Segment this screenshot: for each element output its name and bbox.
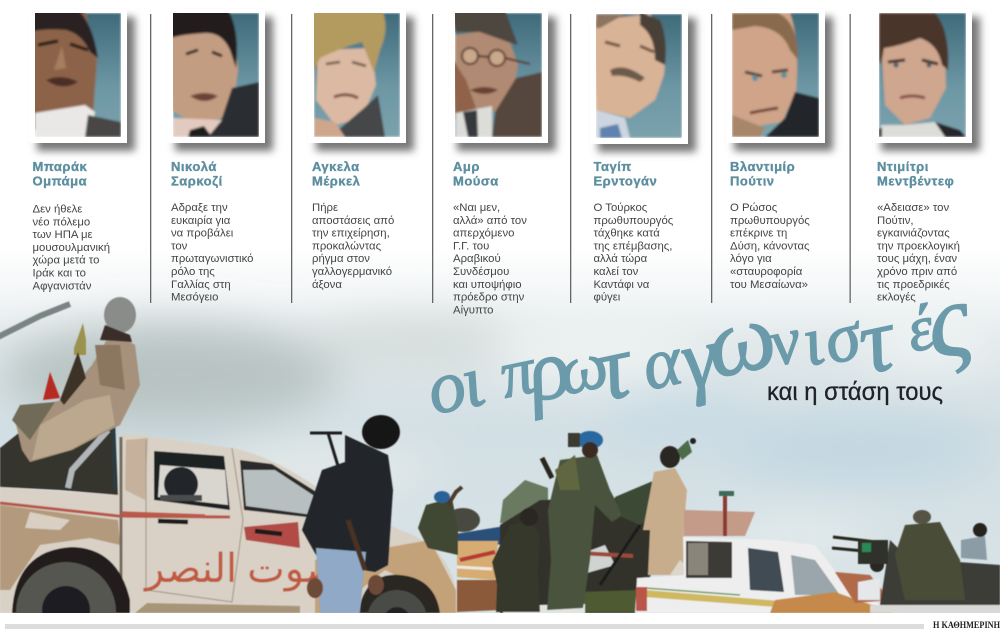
title: brush lettering: σ [817, 297, 870, 380]
launcher [614, 480, 653, 525]
profile text: Erdogan: αλλά τώρα [594, 253, 648, 265]
profile text: Obama: Ιράκ και το [32, 268, 86, 280]
profile text: Merkel: άξονα [312, 279, 342, 291]
title: brush lettering: π [492, 331, 543, 413]
profile text: Moussa: Γ.Γ. του [453, 240, 489, 252]
title: brush lettering: ω [551, 325, 614, 410]
profile text: Moussa: απερχόμενο [453, 228, 514, 240]
profile text: Putin: Δύση, κάνοντας [730, 240, 810, 252]
profile text: Medvedev: εγκαινιάζοντας [877, 228, 950, 240]
white truck [635, 537, 900, 613]
portrait: Erdogan [590, 10, 696, 152]
rack [684, 510, 755, 536]
soldiers and vehicles, centre [418, 431, 900, 613]
profile text: Erdogan: πρωθυπουργός [594, 215, 674, 227]
profile text: Merkel: αποστάσεις από [312, 215, 394, 227]
portrait: Moussa [449, 9, 556, 151]
title: brush lettering: ι [795, 302, 830, 382]
profile text: Putin: λόγο για [730, 253, 772, 265]
roll bar and bed [0, 420, 118, 495]
profile text: Medvedev: εκλογές [877, 292, 916, 304]
profile text: Moussa: «Ναι μεν, [453, 202, 500, 214]
profile text: Sarkozy: ευκαιρία για [171, 215, 231, 227]
portrait: Sarkozy [167, 9, 273, 151]
title: brush lettering: τ [849, 286, 905, 394]
portrait: Obama [29, 5, 135, 151]
profile text: Putin: «σταυροφορία [730, 266, 803, 278]
profile text: Merkel: ρήγμα στον [312, 253, 370, 265]
background photo: sky and battlefield [0, 276, 1000, 613]
door handles [158, 521, 282, 534]
portrait: Merkel [308, 9, 414, 151]
graffiti: صوت النصر [143, 546, 339, 592]
profile text: Erdogan: Καντάφι να [594, 279, 650, 291]
profile text: Merkel: Μέρκελ [312, 174, 361, 188]
profile text: Obama: νέο πόλεμο [32, 216, 90, 228]
profile text: Moussa: πρόεδρο στην [453, 292, 525, 304]
title: brush lettering: ο [418, 343, 474, 431]
footer bar [5, 624, 924, 629]
profile text: Moussa: και υποψήφιο [453, 279, 522, 291]
profile text: Erdogan: Ερντογάν [594, 174, 657, 188]
profile text: Sarkozy: Νικολά [171, 159, 217, 174]
soldier in tan [643, 468, 687, 575]
right vehicle with soldiers [832, 510, 1000, 613]
profile text: Putin: Βλαντιμίρ [730, 159, 795, 174]
profile text: Obama: Αφγανιστάν [32, 280, 92, 292]
subtitle: και η στάση τους [767, 378, 943, 406]
sky [0, 245, 1000, 613]
left pickup truck with gunner [0, 297, 458, 635]
profile text: Medvedev: την προεκλογική [877, 240, 960, 252]
profile text: Erdogan: Ο Τούρκος [594, 202, 648, 214]
profile text: Sarkozy [171, 159, 253, 304]
profile text: Merkel: προκαλώντας [312, 240, 382, 252]
title: brush lettering: ς [914, 259, 982, 382]
profile text: Putin [730, 159, 810, 291]
profile text: Sarkozy: Αδραξε την [171, 202, 228, 214]
title: brush lettering: ν [763, 303, 807, 381]
profile text: Moussa: Αίγυπτο [453, 304, 493, 316]
red stripes [0, 503, 230, 517]
title: brush lettering: έ [900, 291, 940, 366]
profile text: Erdogan: της επέμβασης, [594, 240, 672, 252]
profile text: Obama: μουσουλμανική [32, 242, 110, 254]
soldier with blue beret [547, 455, 623, 610]
wheels [12, 547, 130, 613]
soldier with black cap [492, 546, 540, 613]
truck windows [154, 451, 230, 510]
profile text: Obama: χώρα μετά το [32, 255, 99, 267]
profile text: Erdogan: Ταγίπ [594, 159, 632, 174]
profile text: Merkel: Πήρε [312, 202, 338, 214]
title: brush lettering: ω [696, 280, 785, 399]
profile text: Putin: πρωθυπουργός [730, 215, 810, 227]
profile text: Obama [32, 159, 110, 292]
green bag [500, 480, 548, 525]
profile text: Moussa [453, 159, 527, 316]
left soldier with blue beret [418, 498, 458, 555]
tyre and tarp [454, 507, 481, 533]
profile text: Medvedev: «Αδειασε» τον [877, 202, 949, 214]
profile text: Moussa: αλλά» από τον [453, 215, 527, 227]
profile text: Moussa: Συνδέσμου [453, 266, 509, 278]
profile text: Putin: Ο Ρώσος [730, 202, 778, 214]
profile text: Sarkozy: Σαρκοζί [171, 174, 223, 188]
dividers [150, 14, 851, 303]
standing man with rifle [302, 415, 400, 613]
profile text: Erdogan [594, 159, 674, 304]
profile text: Moussa: Αραβικού [453, 253, 501, 265]
profile text: Sarkozy: Γαλλίας στη [171, 279, 231, 291]
profile text: Sarkozy: ρόλο της [171, 266, 215, 278]
profile text: Medvedev: τους μάχη, έναν [877, 253, 957, 265]
title: brush lettering: τ [586, 313, 642, 421]
profile text: Erdogan: φύγει [594, 292, 621, 304]
profile text: Moussa: Μούσα [453, 174, 499, 188]
profile text: Sarkozy: τον [171, 240, 188, 252]
profile text: Merkel: Αγκελα [312, 159, 360, 174]
orange sign [457, 541, 498, 580]
title: brush lettering: α [635, 319, 689, 406]
profile text: Sarkozy: να προβάλει [171, 228, 234, 240]
profile text: Medvedev: Ντιμίτρι [877, 159, 929, 174]
profile text: Medvedev: χρόνο πριν από [877, 266, 957, 278]
rear vehicle mass [500, 490, 655, 613]
profile text: Sarkozy: πρωταγωνιστικό [171, 253, 253, 265]
profile text: Merkel [312, 159, 394, 291]
profile text: Merkel: γαλλογερμανικό [312, 266, 392, 278]
profile text: Erdogan: τάχθηκε κατά [594, 228, 660, 240]
profile text: Erdogan: καλεί τον [594, 266, 639, 278]
portrait: Putin [726, 9, 833, 151]
title: brush lettering: γ [672, 307, 727, 409]
profile text: Merkel: την επιχείρηση, [312, 228, 390, 240]
profile text: Putin: επέκρινε τη [730, 228, 787, 240]
title: brush lettering: ρ [515, 318, 578, 421]
profile text: Obama: Ομπάμα [32, 174, 87, 188]
profile text: Obama: Δεν ήθελε [32, 204, 82, 216]
profile text: Obama: Μπαράκ [32, 159, 87, 174]
portrait: Medvedev [873, 9, 980, 151]
profile text: Medvedev [877, 159, 960, 304]
profile text: Obama: των ΗΠΑ με [32, 229, 93, 241]
rifle barrel [0, 304, 70, 337]
mud patches [0, 505, 120, 590]
title: brush lettering: ι [452, 340, 492, 424]
profile text: Putin: του Μεσαίωνα» [730, 279, 808, 291]
profile text: Medvedev: Μεντβέντεφ [877, 174, 954, 188]
profile text: Medvedev: Πούτιν, [877, 215, 914, 227]
profile text: Putin: Πούτιν [730, 174, 775, 188]
door seam [120, 437, 122, 613]
profile text: Moussa: Αμρ [453, 159, 480, 174]
truck body [0, 434, 458, 613]
profile text: Sarkozy: Μεσόγειο [171, 292, 218, 304]
gunner [15, 331, 140, 462]
profile text: Medvedev: τις προεδρικές [877, 279, 950, 291]
